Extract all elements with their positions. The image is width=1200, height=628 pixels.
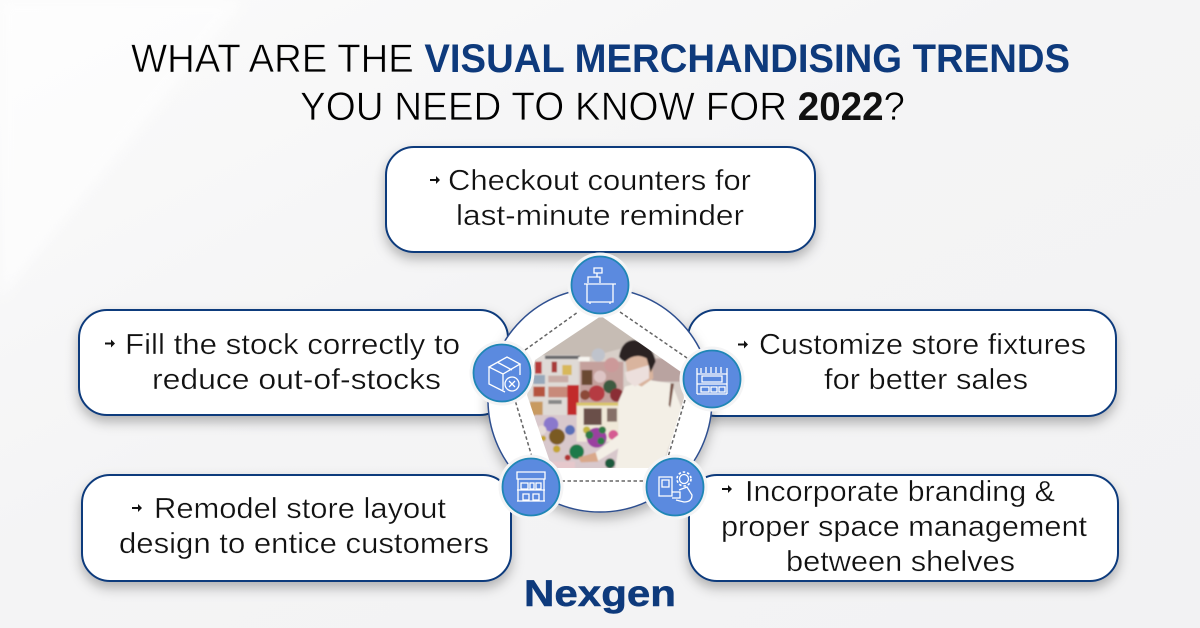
central white ring: [488, 288, 712, 512]
card: customize fixtures: [688, 310, 1116, 416]
card: fill the stock: [79, 310, 508, 415]
icon: store fixtures: [680, 346, 744, 412]
card: branding and space: Incorporate branding &: [745, 476, 1055, 508]
card: checkout counters: [386, 147, 815, 252]
card: branding and space: between shelves: [786, 546, 1015, 578]
logo: Nexgen: Nexgen: [524, 573, 676, 614]
card: customize fixtures: for better sales: [824, 364, 1028, 396]
icon: store layout: [498, 454, 564, 520]
card: remodel layout: design to entice customers: [119, 528, 489, 560]
title: WHAT ARE THE VISUAL MERCHANDISING TRENDS: [131, 37, 1070, 81]
photo: shopper in store: [525, 315, 690, 470]
card: checkout counters: Checkout counters for: [448, 165, 751, 197]
card: fill the stock: reduce out-of-stocks: [152, 364, 441, 396]
title: YOU NEED TO KNOW FOR 2022?: [300, 85, 905, 129]
card: customize fixtures: Customize store fixtures: [759, 329, 1086, 361]
card: fill the stock: Fill the stock correctly to: [125, 329, 460, 361]
icon: box with x: [470, 340, 534, 406]
card: remodel layout: Remodel store layout: [154, 493, 446, 525]
title: [131, 37, 1070, 129]
card: branding and space: proper space management: [721, 511, 1087, 543]
dashed pentagon: [515, 312, 687, 481]
card: branding and space: [689, 475, 1118, 581]
card: checkout counters: last-minute reminder: [456, 200, 744, 232]
icon: branding hand and gear: [642, 454, 708, 520]
card: remodel layout: [82, 475, 511, 581]
icon: checkout counter: [568, 252, 632, 318]
